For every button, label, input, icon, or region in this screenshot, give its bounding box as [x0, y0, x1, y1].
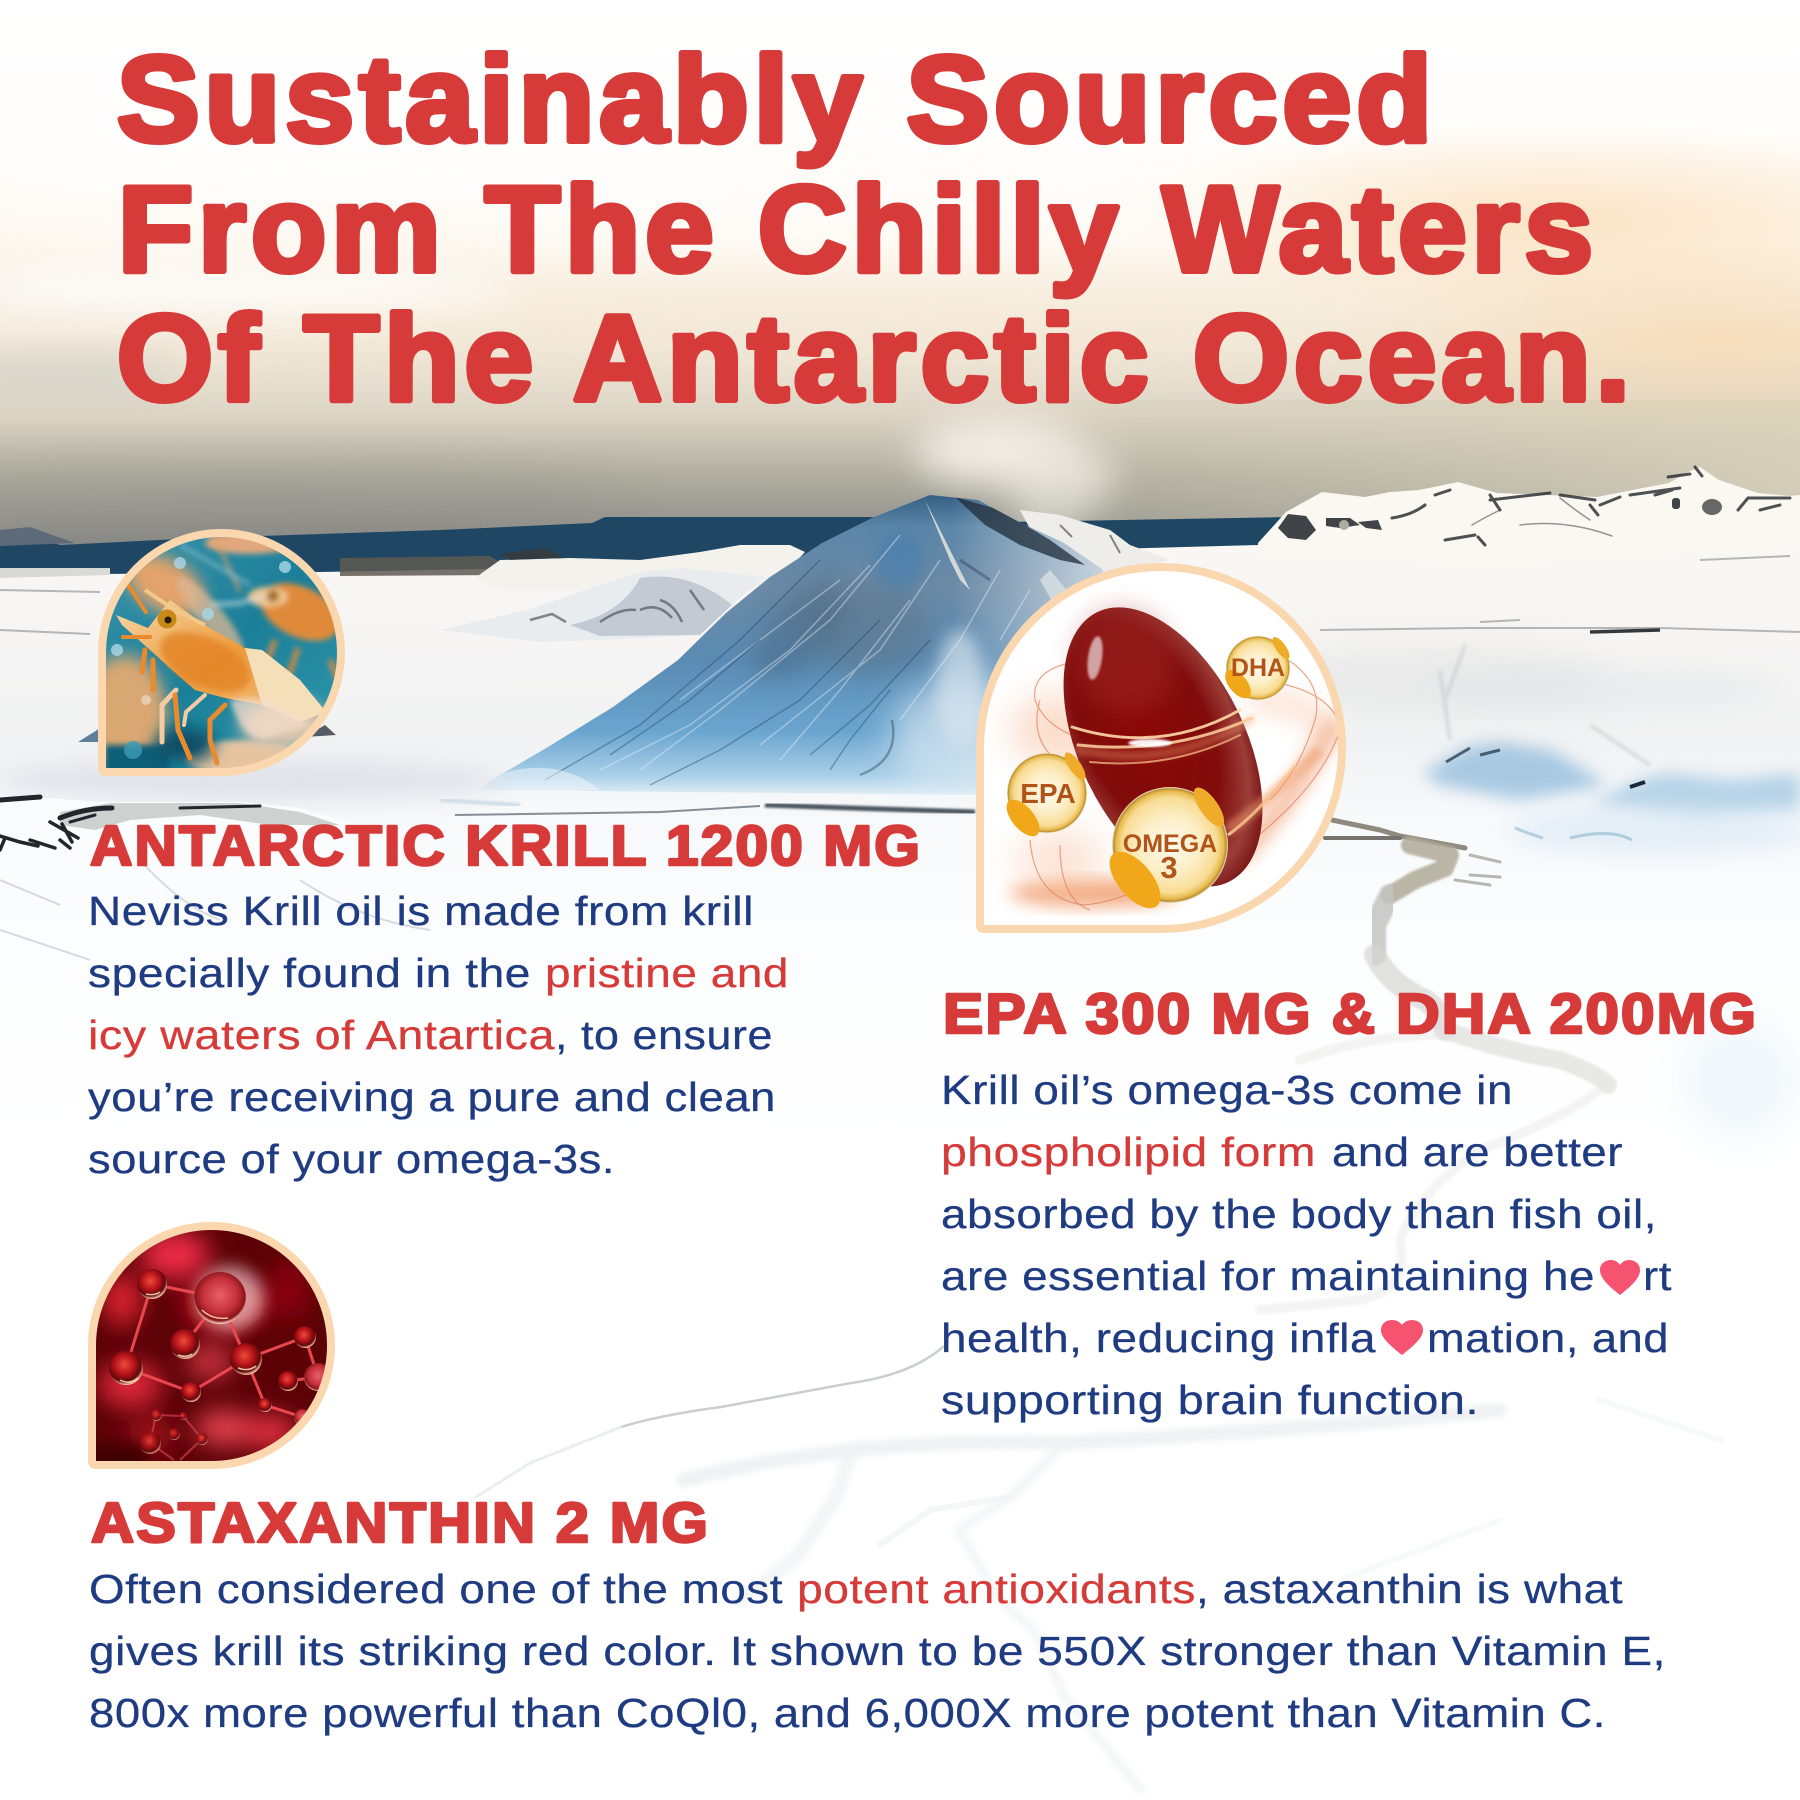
text block: astaxanthin description: Often considered one of the most — [89, 1566, 783, 1612]
left ridge — [0, 797, 433, 900]
badge: EPA: EPA — [1020, 778, 1076, 809]
snow shading and dark crack lines — [765, 805, 975, 812]
text block: EPA and DHA description: health, reducing infla — [941, 1315, 1376, 1361]
distant dark ridge — [0, 517, 1290, 585]
text block: EPA and DHA description: Krill oil’s omega-3s come in — [941, 1067, 1513, 1113]
icon: omega-3 capsule teardrop — [980, 567, 1342, 929]
small left hills — [475, 545, 805, 590]
text block: EPA and DHA description: rt — [1643, 1253, 1672, 1299]
badge: omega 3: 3 — [1160, 850, 1178, 885]
title — [117, 31, 1635, 426]
main krill — [116, 600, 326, 722]
icon: astaxanthin molecule teardrop — [88, 1223, 338, 1475]
text block: astaxanthin description — [89, 1566, 1666, 1736]
second krill — [180, 538, 349, 680]
title: From The Chilly Waters — [118, 161, 1598, 297]
icon: krill photo teardrop — [83, 529, 349, 779]
heading: EPA and DHA: EPA 300 MG & DHA 200MG — [943, 982, 1758, 1046]
steam plume — [915, 416, 1115, 542]
text block: astaxanthin description: , astaxanthin is what — [1196, 1566, 1623, 1612]
meltwater river — [476, 820, 1720, 1790]
capsule — [1023, 576, 1303, 918]
text block: krill description: you’re receiving a pure and clean — [88, 1074, 776, 1120]
text block: EPA and DHA description: absorbed by the body than fish oil, — [941, 1191, 1657, 1237]
text block: krill description: Neviss Krill oil is made from krill — [88, 888, 754, 934]
text block: astaxanthin description: gives krill its striking red color. It shown to be 550X stronger than Vitamin E, — [89, 1628, 1666, 1674]
heading: astaxanthin: ASTAXANTHIN 2 MG — [91, 1491, 710, 1555]
badge: DHA: DHA — [1231, 654, 1285, 682]
text block: astaxanthin description: potent antioxidants — [797, 1566, 1196, 1612]
badge: omega 3 — [1100, 783, 1230, 917]
badge: DHA — [1220, 634, 1293, 703]
badge: omega 3: OMEGA — [1123, 830, 1217, 858]
volcano — [470, 490, 1120, 800]
text block: EPA and DHA description: supporting brain function. — [941, 1377, 1479, 1423]
text block: EPA and DHA description — [941, 1067, 1672, 1423]
title: Of The Antarctic Ocean. — [117, 290, 1635, 426]
text block: EPA and DHA description: are essential for maintaining he — [941, 1253, 1595, 1299]
text block: krill description: , to ensure — [555, 1012, 773, 1058]
icon: heart in heart — [1600, 1260, 1640, 1295]
heading: Antarctic krill: ANTARCTIC KRILL 1200 MG — [90, 814, 922, 878]
icon: heart in inflammation — [1381, 1320, 1423, 1355]
text block: krill description: pristine and — [545, 950, 789, 996]
text block: krill description: icy waters of Antartica — [88, 1012, 555, 1058]
text block: EPA and DHA description: and are better — [1332, 1129, 1623, 1175]
right snowy peaks — [1258, 467, 1800, 565]
right-of-cone ridge — [1020, 510, 1170, 585]
text block: EPA and DHA description: phospholipid form — [941, 1129, 1316, 1175]
text block: EPA and DHA description: mation, and — [1427, 1315, 1669, 1361]
text block: astaxanthin description: 800x more powerful than CoQl0, and 6,000X more potent than Vitamin C. — [89, 1690, 1606, 1736]
snow base — [0, 495, 1800, 1800]
text block: krill description: source of your omega-3s. — [88, 1136, 615, 1182]
text block: krill description — [88, 888, 789, 1182]
title: Sustainably Sourced — [117, 31, 1437, 167]
badge: EPA — [1000, 749, 1089, 842]
text block: krill description: specially found in the — [88, 950, 531, 996]
